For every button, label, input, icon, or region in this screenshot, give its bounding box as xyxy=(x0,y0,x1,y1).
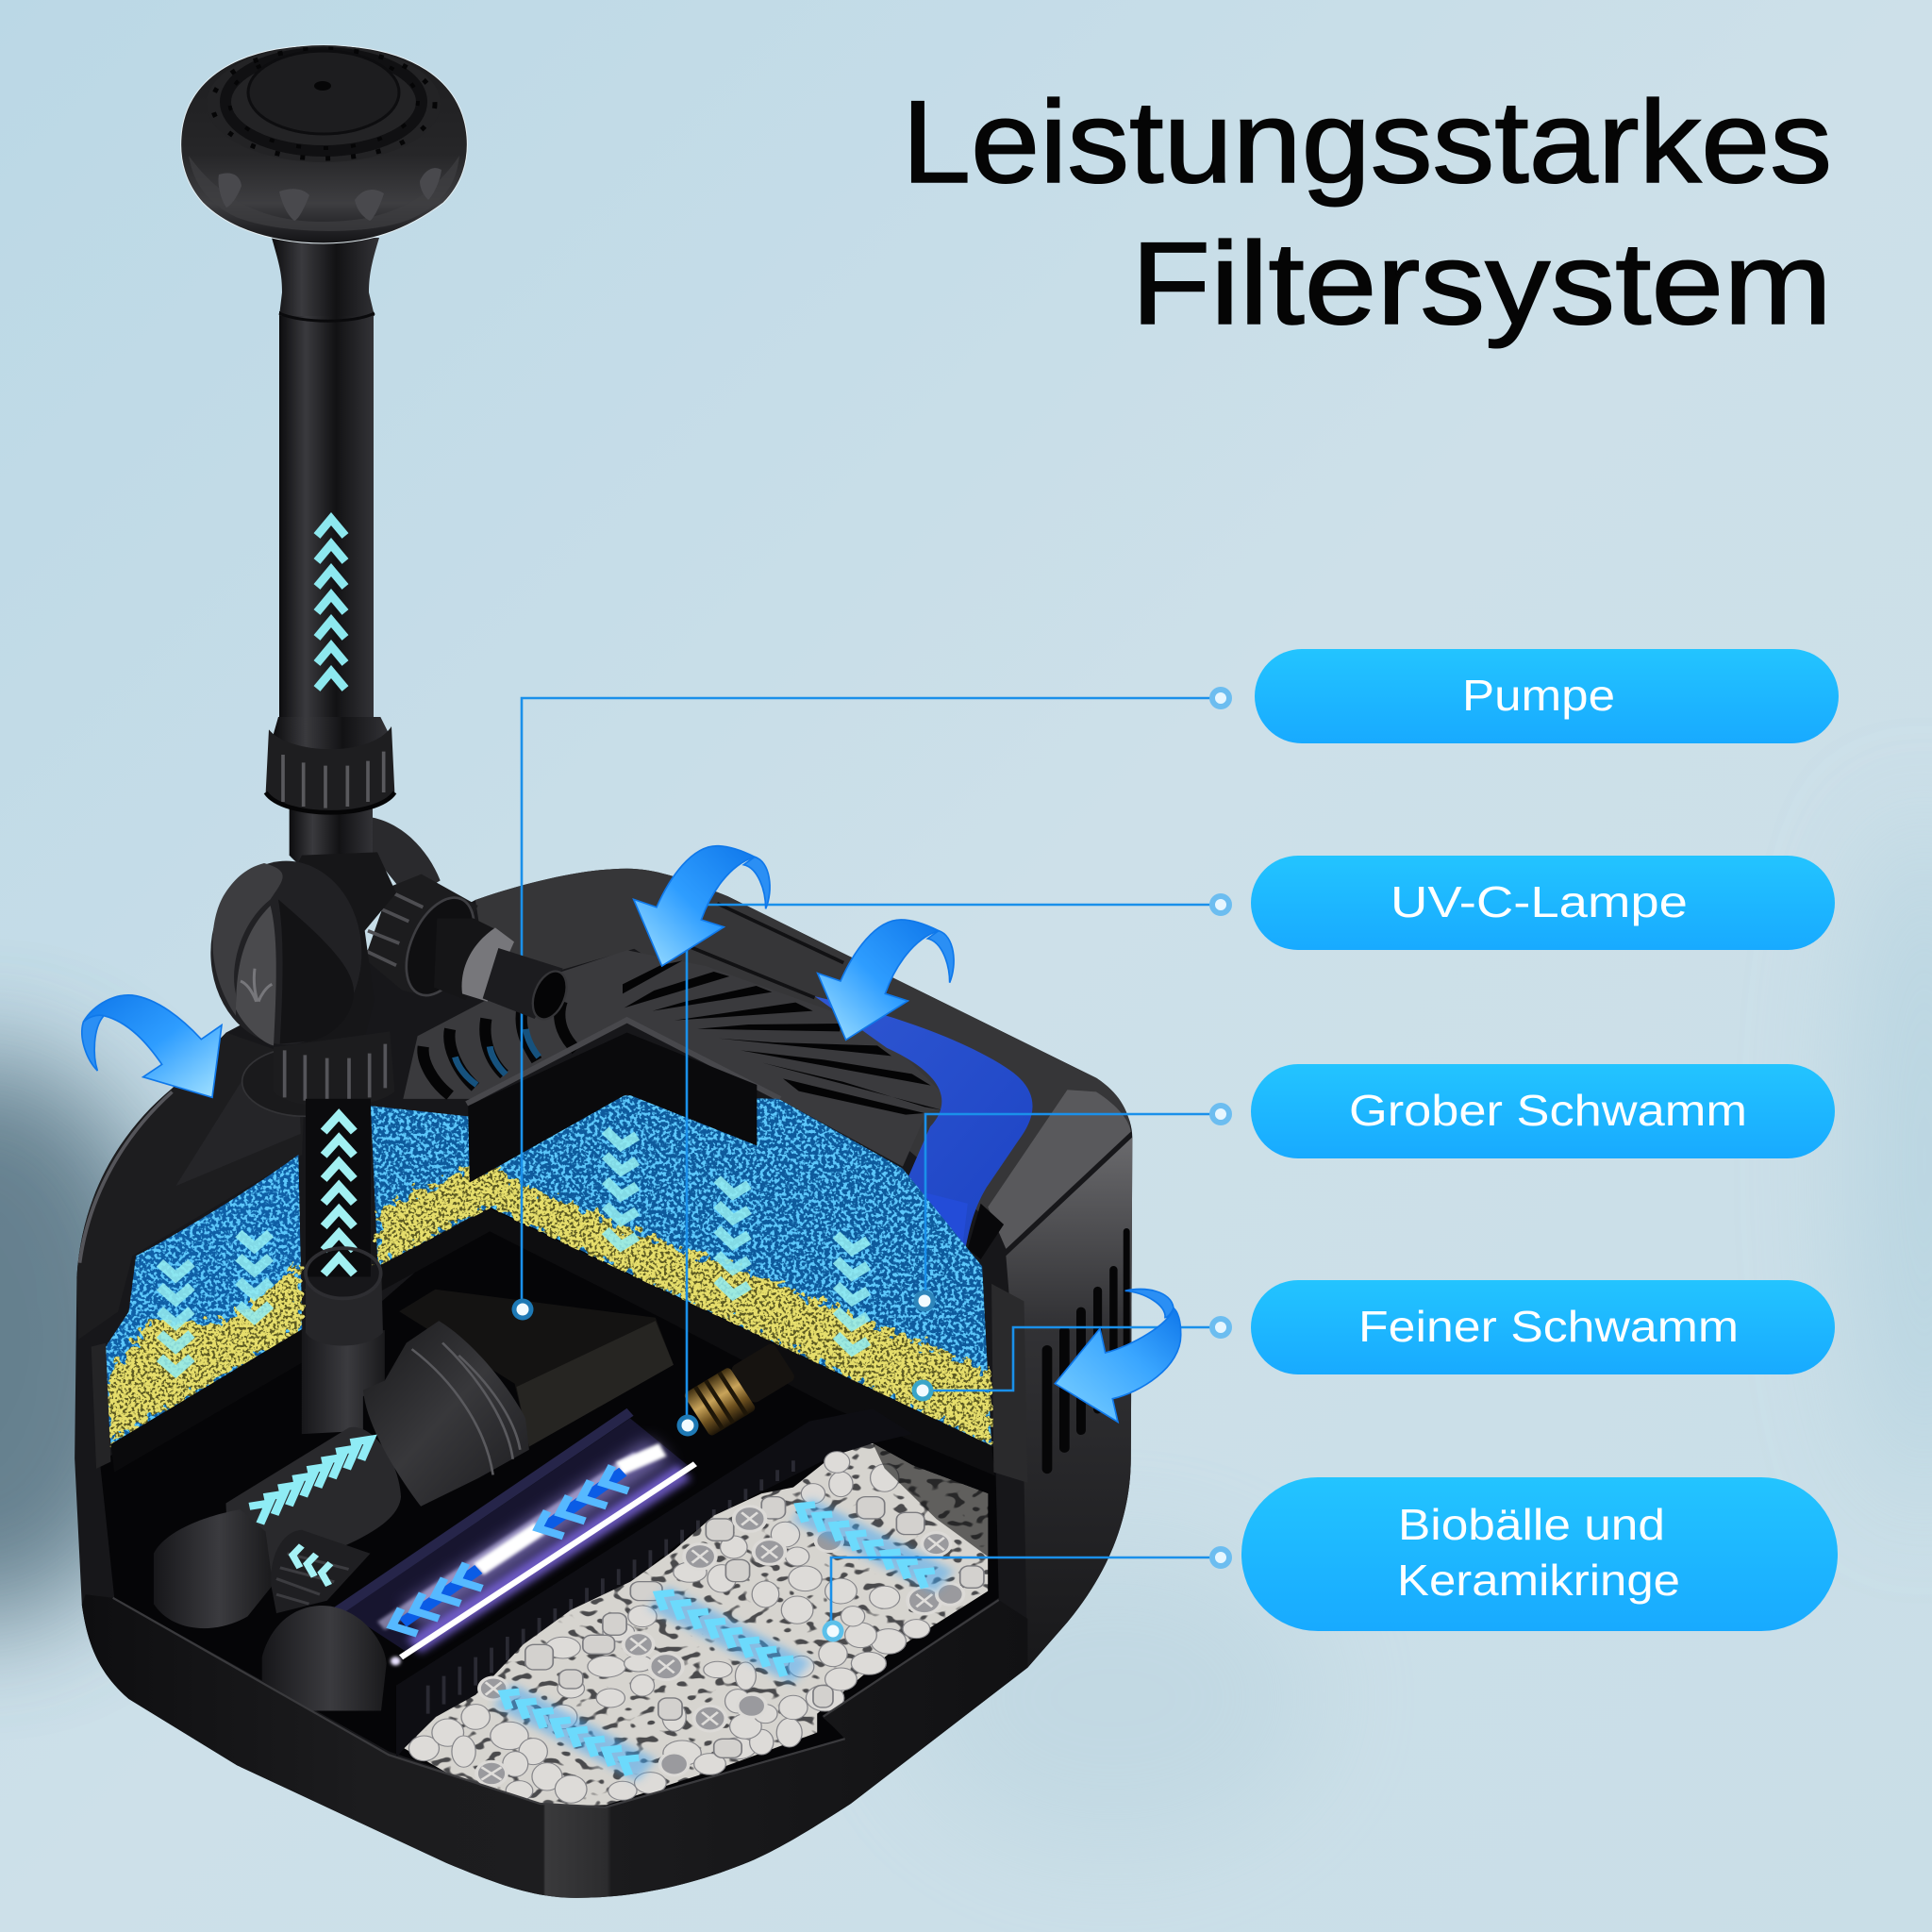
label: UV-C-Lampe: UV-C-Lampe xyxy=(1391,877,1688,926)
label: Pumpe xyxy=(1212,649,1839,743)
T-junction and riser xyxy=(210,717,573,1116)
stem joint ring xyxy=(279,313,375,321)
strainer left blue glimpse xyxy=(455,1029,539,1085)
wheel spokes xyxy=(481,1512,944,1780)
barb first step xyxy=(434,918,498,1000)
dot: fine sponge xyxy=(911,1379,934,1402)
title: Filtersystem xyxy=(1131,219,1832,349)
side vents xyxy=(1047,1231,1126,1469)
lower union nut xyxy=(274,1031,394,1107)
outlet nut xyxy=(363,874,478,993)
title xyxy=(902,77,1832,349)
barb tip xyxy=(483,948,563,1019)
arrow: lid inflow xyxy=(818,920,954,1040)
dial grey leaf xyxy=(236,906,276,1045)
lamp bright core xyxy=(478,1450,662,1569)
pebble bed base xyxy=(404,1443,988,1807)
left shoulder xyxy=(76,1033,306,1340)
sponge: left block xyxy=(104,1155,302,1444)
right side face xyxy=(1006,1138,1132,1668)
dot: pump xyxy=(511,1298,534,1321)
lamp lower line xyxy=(401,1464,695,1657)
disc left rim xyxy=(212,863,283,1016)
label: Feiner Schwamm xyxy=(1212,1280,1835,1374)
label: Grober Schwamm: Grober Schwamm xyxy=(1349,1086,1747,1135)
basket top edge xyxy=(334,1412,630,1613)
pump end cap xyxy=(154,1509,273,1628)
junction neck xyxy=(290,802,373,877)
stem flow chevrons xyxy=(317,519,345,689)
housing body xyxy=(75,869,1132,1898)
lamp haze xyxy=(413,1450,659,1616)
dot: biomedia xyxy=(823,1621,843,1641)
pump outlet tube xyxy=(225,1427,401,1588)
upper pipe cone xyxy=(273,717,390,755)
bio ball wheels xyxy=(476,1507,963,1786)
motor ribs xyxy=(412,1342,520,1474)
label: Biobälle und Keramikringe: Biobälle und xyxy=(1398,1500,1665,1549)
barb grey collar xyxy=(461,927,514,1002)
lamp spark xyxy=(391,1657,401,1665)
left post xyxy=(92,1343,110,1469)
arrow: side inflow xyxy=(1055,1290,1181,1422)
dial dark leaf xyxy=(278,899,354,1044)
interior cavity xyxy=(100,1207,999,1807)
flow glow xyxy=(504,1509,944,1771)
label: Biobälle und Keramikringe xyxy=(1212,1477,1838,1631)
front tray rim xyxy=(82,1594,1027,1898)
diverter body xyxy=(283,852,396,1050)
connector flow chevrons xyxy=(292,1545,330,1585)
label: Feiner Schwamm: Feiner Schwamm xyxy=(1358,1302,1739,1351)
riser pipe xyxy=(306,1099,383,1346)
stem pipe xyxy=(279,311,374,731)
callout leader lines xyxy=(522,698,1217,1633)
lid edge highlight xyxy=(988,1090,1131,1249)
pump elbow xyxy=(302,1330,385,1434)
left support plate xyxy=(110,1329,306,1473)
lamp inner tube xyxy=(381,1456,638,1625)
label: Grober Schwamm xyxy=(1212,1064,1835,1158)
socket ring xyxy=(306,1248,381,1298)
lid top surface xyxy=(475,869,1131,1241)
label: Pumpe: Pumpe xyxy=(1462,671,1615,720)
ribbed bio balls xyxy=(525,1497,984,1757)
lamp flow chevrons xyxy=(391,1466,628,1634)
barb opening xyxy=(526,966,573,1024)
arrow: top inflow xyxy=(634,846,770,966)
lamp lower glow xyxy=(413,1472,684,1646)
nozzle head xyxy=(181,45,467,243)
left shoulder outline xyxy=(79,1091,172,1263)
title: Leistungsstarkes xyxy=(902,77,1832,208)
sponge support plate xyxy=(378,1208,995,1475)
elbow socket xyxy=(306,1274,383,1346)
base plate disc xyxy=(242,1047,368,1116)
blue handle xyxy=(815,996,1033,1259)
nozzle grip notches xyxy=(218,168,441,221)
sponge: right block xyxy=(371,1095,991,1446)
strainer left slots xyxy=(423,1001,576,1095)
strainer right slits xyxy=(623,960,941,1115)
pump and UV lamp detail xyxy=(154,1290,695,1710)
flow chevrons xyxy=(504,1505,935,1775)
basket wall xyxy=(396,1408,912,1757)
blue flow arrows xyxy=(82,846,1181,1422)
upper corner shade xyxy=(873,1443,988,1557)
strainer tray xyxy=(403,950,956,1167)
pebble stones xyxy=(408,1452,930,1803)
riser flow chevrons xyxy=(324,1115,354,1274)
tube flow chevrons xyxy=(249,1440,371,1524)
sponge flow chevrons xyxy=(159,1130,868,1372)
motor housing xyxy=(363,1321,529,1507)
callout target dots xyxy=(511,1291,936,1641)
label: UV-C-Lampe xyxy=(1212,856,1835,950)
dot: coarse sponge xyxy=(913,1291,936,1311)
lamp flow under-glow xyxy=(403,1472,623,1623)
rear diverter disc xyxy=(371,818,441,899)
knurled connector xyxy=(271,1530,371,1613)
strainer front drop xyxy=(468,1033,757,1183)
arrow: left inflow xyxy=(82,995,222,1097)
gold lamp socket xyxy=(683,1341,799,1437)
lid seam xyxy=(677,904,843,998)
pump filter device xyxy=(75,869,1132,1898)
outlet flange xyxy=(392,888,488,1006)
left shoulder facet xyxy=(175,1060,301,1186)
dot: UV lamp xyxy=(677,1415,698,1436)
lamp end cap xyxy=(262,1606,387,1710)
pump block xyxy=(399,1290,674,1446)
brand emblem xyxy=(241,969,272,1002)
divider post xyxy=(991,1284,1027,1483)
upper union nut xyxy=(266,726,394,813)
lamp glass tube xyxy=(345,1418,688,1654)
diverter disc xyxy=(210,861,361,1044)
label: Biobälle und Keramikringe: Keramikringe xyxy=(1397,1556,1680,1605)
fountain stem xyxy=(181,45,467,731)
biomedia basket xyxy=(396,1408,988,1807)
pump block side xyxy=(516,1321,674,1446)
stem neck xyxy=(272,238,379,316)
rim top highlight xyxy=(113,1598,999,1807)
